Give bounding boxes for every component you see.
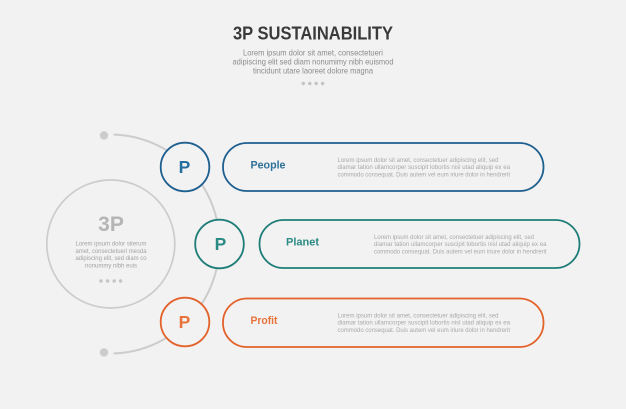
intro text: adipiscing elit sed diam nonumimy nibh euismod — [232, 56, 394, 66]
planet pill — [260, 220, 580, 268]
connecting arc — [114, 134, 219, 354]
profit text — [338, 312, 510, 334]
planet badge: P — [215, 234, 227, 254]
bottom arc end dot — [100, 348, 108, 357]
intro text — [232, 48, 394, 75]
people text: Lorem ipsum dolor sit amet, consectetuer adipiscing elit, sed — [338, 157, 499, 164]
profit pill — [223, 298, 544, 347]
intro text: tincidunt utare laoreet dolore magna — [253, 65, 373, 75]
intro text: Lorem ipsum dolor sit amet, consectetueri — [243, 48, 383, 58]
panel: planet — [195, 220, 579, 268]
title dots — [302, 82, 324, 85]
planet badge — [195, 220, 244, 268]
title: 3P SUSTAINABILITY — [233, 22, 394, 44]
central text: nonummy nibh euis — [85, 262, 137, 270]
planet text — [374, 234, 547, 256]
people text: commodo consequat. Duis autem vel eum iriure dolor in hendrerit — [338, 172, 510, 178]
people text: diamar tation ullamcorper suscipit lobortis nisl utad aliquip ex ea — [338, 164, 510, 171]
planet text: diamar tation ullamcorper suscipit lobortis nisl utad aliquip ex ea — [374, 241, 547, 248]
people badge: P — [179, 157, 191, 177]
central text: amet, consectetueri mesda — [76, 248, 147, 255]
profit text: commodo consequat. Duis autem vel eum iriure dolor in hendrerit — [338, 327, 510, 334]
people label: People — [250, 160, 286, 172]
people text — [338, 157, 510, 178]
panel: people — [161, 143, 543, 191]
profit badge — [161, 298, 209, 346]
profit text: diamar tation ullamcorper suscipit lobortis nisl utad aliquip ex ea — [338, 320, 510, 327]
profit text: Lorem ipsum dolor sit amet, consectetuer adipiscing elit, sed — [338, 312, 499, 319]
central text — [76, 241, 147, 270]
planet text: Lorem ipsum dolor sit amet, consectetuer adipiscing elit, sed — [374, 234, 534, 241]
central text: adipiscing elit, sed diam co — [76, 255, 147, 262]
central dots — [99, 279, 122, 283]
planet label: Planet — [286, 236, 319, 248]
planet text: commodo consequat. Duis autem vel eum iriure dolor in hendrerit — [374, 248, 547, 256]
profit label: Profit — [250, 315, 278, 327]
people badge — [161, 143, 209, 191]
profit badge: P — [179, 312, 191, 332]
people pill — [223, 143, 544, 191]
central circle: 3P — [47, 180, 175, 308]
panel: profit — [161, 298, 543, 347]
central heading: 3P — [98, 213, 124, 236]
top arc end dot — [100, 131, 108, 140]
central text: Lorem ipsum dolor siterum — [76, 241, 146, 248]
